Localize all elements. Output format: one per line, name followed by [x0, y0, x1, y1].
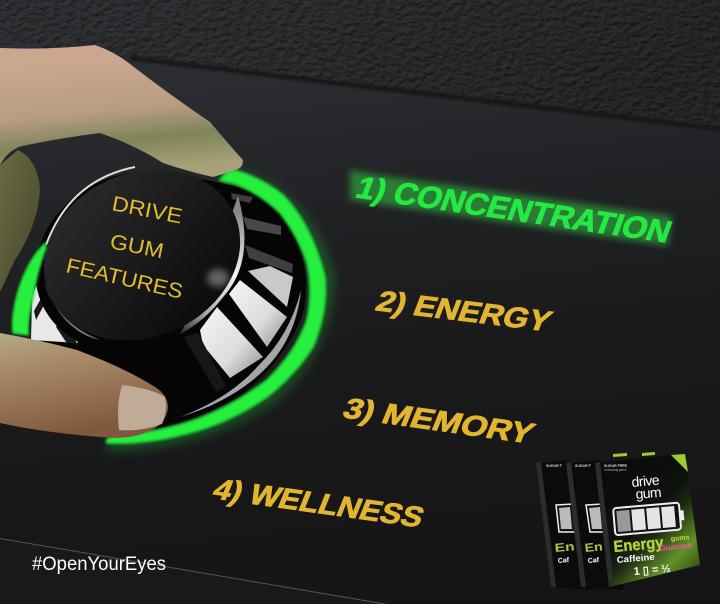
pack 2	[566, 460, 624, 590]
background: lower leather strip	[0, 538, 390, 604]
pack 2: Caf	[588, 557, 600, 565]
ribs: left side	[31, 262, 78, 345]
feature 1: concentration	[350, 170, 677, 249]
pack 3: front: 9 Chewing gums	[604, 468, 627, 472]
feature 2: energy: 2) ENERGY	[371, 285, 557, 338]
green light arc: left	[12, 243, 46, 335]
pack 1: SUGAR F	[546, 464, 563, 468]
pack 2: SUGAR F	[575, 464, 592, 468]
knob top disc	[16, 139, 268, 371]
pack 2: En	[584, 539, 603, 555]
ribs: right side	[184, 193, 293, 392]
hand: hidden finger	[0, 150, 40, 292]
concentration label: 1) CONCENTRATION	[352, 170, 677, 249]
hashtag: #OpenYourEyes	[32, 554, 166, 575]
flavour tab	[671, 454, 688, 472]
green light arc: main	[107, 170, 326, 443]
feature 3: memory: 3) MEMORY	[338, 393, 539, 450]
knob highlight	[207, 269, 229, 287]
product: gum packs	[536, 452, 700, 590]
knob label	[64, 192, 185, 304]
knob label: FEATURES	[64, 254, 185, 304]
hand: index finger	[0, 45, 243, 177]
hand: thumb	[0, 333, 168, 438]
thumb nail	[118, 385, 166, 430]
knob label: DRIVE	[110, 192, 184, 228]
brand: drive	[631, 472, 660, 490]
pack 3: front	[595, 452, 700, 587]
background: upper leather panel	[0, 0, 720, 132]
concentration glow	[350, 170, 672, 246]
knob glow	[107, 176, 325, 442]
ingredients: Caffeine	[616, 552, 655, 565]
outer chrome ring	[180, 290, 301, 417]
pack 3: front: SUGAR FREE	[604, 464, 628, 468]
pack 1	[536, 460, 594, 590]
pack 1: En	[554, 539, 575, 555]
pack 1: Caf	[558, 557, 570, 565]
battery	[613, 502, 685, 535]
feature 4: wellness: 4) WELLNESS	[208, 474, 429, 534]
knob base	[28, 177, 306, 432]
pack 3: front: gum	[635, 484, 662, 502]
energy label: Energy	[613, 535, 664, 556]
chrome rim around disc	[6, 140, 266, 384]
pack 3: front: gums	[671, 534, 690, 543]
knob label: GUM	[108, 230, 165, 263]
knob	[6, 139, 325, 442]
dosage: 1 ▯ = ½	[633, 563, 671, 578]
pack 3: front: Guarana	[659, 541, 693, 553]
